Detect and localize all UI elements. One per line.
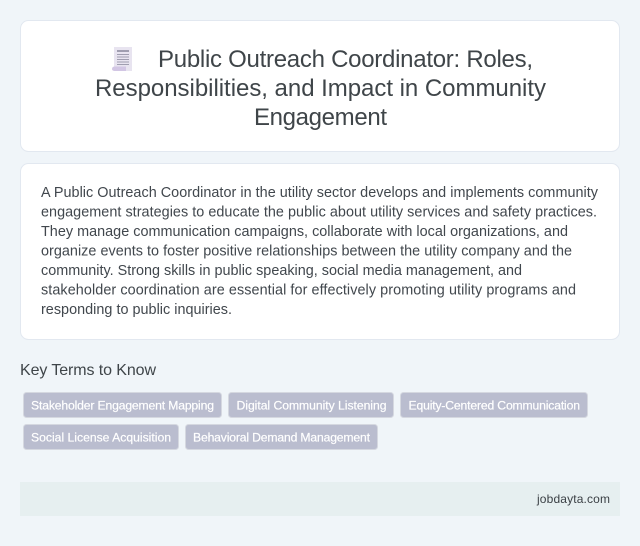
- text block: description: They manage communication campaigns, collaborate with local organizations, and: [41, 224, 568, 240]
- footer bar: [20, 482, 620, 516]
- text block: description: [41, 185, 599, 318]
- title: [95, 46, 546, 131]
- title: Public Outreach Coordinator: Roles,: [158, 46, 533, 73]
- title: Engagement: [254, 104, 387, 131]
- text block: description: responding to public inquiries.: [41, 302, 232, 318]
- text block: description: A Public Outreach Coordinator in the utility sector develops and implements community: [41, 185, 599, 201]
- chip: stakeholder engagement mapping: [24, 392, 222, 418]
- panel: title card: [20, 20, 620, 152]
- chip: equity-centered communication: Equity-Centered Communication: [408, 398, 580, 412]
- text block: description: community. Strong skills in public speaking, social media management, and: [41, 263, 522, 279]
- text block: description: stakeholder coordination are essential for effectively promoting utility programs and: [41, 282, 576, 298]
- chip: equity-centered communication: [400, 392, 588, 418]
- title: Responsibilities, and Impact in Community: [95, 75, 546, 102]
- chip: social license acquisition: [24, 424, 178, 450]
- chip: digital community listening: Digital Community Listening: [236, 398, 386, 412]
- panel: description card: [20, 164, 620, 340]
- icon: document scroll: [112, 47, 132, 71]
- panel: key term chips: [24, 392, 588, 450]
- footer text: site name: jobdayta.com: [536, 492, 610, 506]
- chip: digital community listening: [228, 392, 394, 418]
- chip: social license acquisition: Social License Acquisition: [31, 430, 171, 444]
- chip: stakeholder engagement mapping: Stakeholder Engagement Mapping: [31, 398, 214, 412]
- chip: behavioral demand management: Behavioral Demand Management: [193, 430, 371, 444]
- heading: key terms: Key Terms to Know: [20, 362, 156, 379]
- text block: description: engagement strategies to educate the public about utility services and safety practices.: [41, 204, 597, 220]
- text block: description: organize events to foster positive relationships between the utility company and the: [41, 244, 572, 260]
- chip: behavioral demand management: [186, 424, 378, 450]
